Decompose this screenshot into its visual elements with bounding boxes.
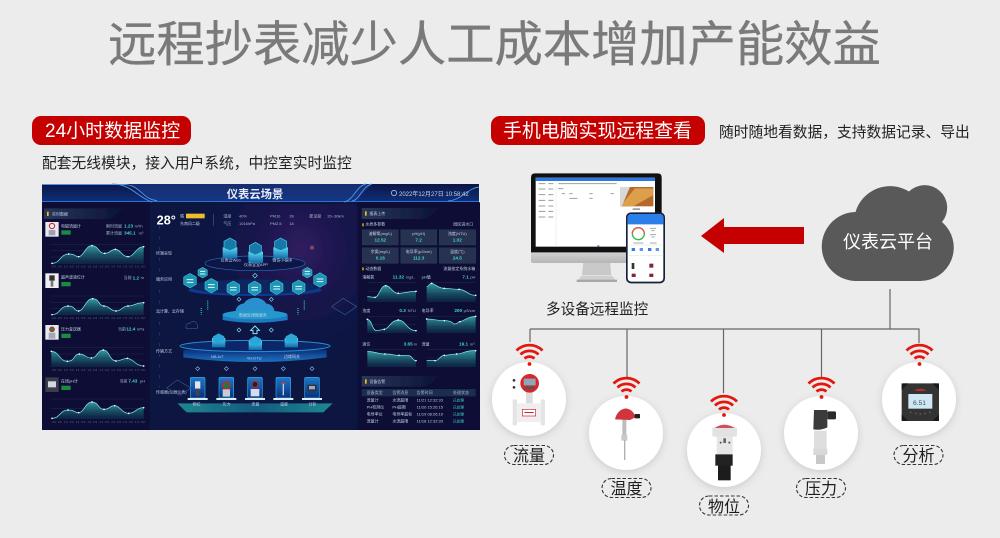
row: pressure chart: kPa bbox=[137, 327, 145, 332]
row: ultrasonic level chart: 1.2 bbox=[133, 275, 140, 280]
alarm table: 处理状态 bbox=[453, 389, 469, 395]
device label: flow bbox=[504, 446, 554, 465]
device label: 多设备远程监控 bbox=[546, 301, 649, 318]
icon: desktop monitor and phone bbox=[531, 173, 665, 283]
section header: report bbox=[362, 208, 442, 219]
dynamic data charts: 流量核定系统水箱 bbox=[443, 265, 475, 271]
water quality cards: 1.02 bbox=[453, 238, 462, 243]
dynamic data charts: NTU bbox=[408, 308, 416, 313]
right heading pill: 手机电脑实现远程查看 bbox=[503, 120, 692, 142]
dynamic data charts: 11.32 bbox=[393, 275, 404, 280]
terminal layer bbox=[205, 238, 305, 271]
row: pH chart: 当前 bbox=[119, 378, 127, 384]
center column: architecture diagram bbox=[156, 212, 357, 412]
dashboard header band: 仪表云场景 bbox=[227, 187, 283, 201]
dynamic data charts: 7.1 bbox=[462, 275, 469, 280]
alarm table: 11/19 08:26:10 bbox=[417, 411, 444, 416]
device label: level: 物位 bbox=[708, 498, 740, 516]
alarm table: 设备告警 bbox=[369, 378, 385, 384]
row: pressure chart: 当前 bbox=[118, 326, 126, 332]
row: flow meter chart: m³/h bbox=[135, 223, 143, 228]
device label: flow: 流量 bbox=[513, 447, 545, 465]
left heading pill: 24小时数据监控 bbox=[45, 120, 180, 142]
panel: monitoring dashboard bbox=[42, 184, 480, 430]
left column: live data bbox=[42, 202, 149, 430]
transmission layer: NB-IoT bbox=[211, 354, 224, 359]
section header: report: 报表上传 bbox=[369, 210, 385, 216]
dynamic data charts: mg/L bbox=[406, 275, 415, 280]
dynamic data charts: 200 bbox=[454, 308, 463, 313]
weather strip: 20~30km bbox=[327, 213, 345, 218]
row: pressure chart: 压力变送器 bbox=[61, 326, 81, 332]
dynamic data charts: 19.1 bbox=[459, 341, 468, 346]
dynamic data charts: m bbox=[414, 341, 418, 346]
alarm table: 已处理 bbox=[453, 411, 464, 416]
row: ultrasonic level chart: 当前 bbox=[124, 274, 132, 280]
weather strip: PM10 bbox=[270, 213, 281, 218]
section header: live data bbox=[44, 208, 125, 219]
sensor layer: 温度 bbox=[280, 400, 288, 406]
dashboard header band bbox=[42, 184, 479, 202]
dynamic data charts: pH bbox=[470, 275, 476, 280]
water quality cards: 浊度(NTU) bbox=[448, 230, 467, 236]
service layer bbox=[184, 267, 326, 301]
water quality cards: 园区进水口 bbox=[453, 220, 473, 226]
dynamic data charts: 浊度 bbox=[362, 307, 370, 313]
water quality cards: 余氯(mg/L) bbox=[371, 248, 391, 254]
weather strip: 40% bbox=[239, 213, 247, 218]
row: pressure chart bbox=[45, 325, 145, 372]
alarm table: 告警时间 bbox=[417, 389, 433, 395]
cloud: platform bbox=[822, 185, 954, 281]
row: flow meter chart: 345.1 bbox=[124, 231, 136, 236]
layer labels: 终端呈现 bbox=[156, 250, 172, 256]
alarm table: 已处理 bbox=[453, 419, 464, 424]
water quality cards: 24.5 bbox=[453, 256, 462, 261]
device label: temperature bbox=[602, 478, 651, 498]
layer labels: 传感器(仪器仪表) bbox=[156, 389, 187, 395]
dynamic data charts: pH值 bbox=[422, 274, 431, 280]
dynamic data charts bbox=[362, 265, 476, 367]
row: ultrasonic level chart: 超声波液位计 bbox=[61, 274, 85, 280]
alarm table: PH超限 bbox=[392, 403, 406, 409]
row: flow meter chart: 瞬时流量 bbox=[106, 222, 122, 228]
alarm table: 11/21 12:32:33 bbox=[417, 397, 444, 402]
alarm table: 电导率超标 bbox=[392, 410, 412, 416]
icon: wifi signal bbox=[614, 378, 640, 399]
row: flow meter chart: 电磁流量计 bbox=[61, 222, 81, 228]
dynamic data charts: 0.3 bbox=[399, 308, 406, 313]
device label: analysis bbox=[894, 446, 943, 465]
alarm table: 水流超限 bbox=[392, 396, 408, 402]
alarm table: 流量计 bbox=[367, 418, 379, 424]
sensor layer: 压力 bbox=[223, 400, 231, 406]
device label: pressure: 压力 bbox=[805, 480, 837, 498]
dynamic data charts: 动态数据 bbox=[365, 265, 381, 271]
alarm table bbox=[362, 376, 476, 424]
weather strip: 18 bbox=[289, 221, 295, 226]
alarm table: 告警消息 bbox=[392, 389, 408, 395]
alarm table: 已处理 bbox=[453, 397, 464, 402]
weather strip bbox=[157, 212, 345, 228]
dynamic data charts: m³ bbox=[470, 341, 475, 346]
weather strip: 晴 bbox=[180, 212, 184, 218]
device label: analysis: 分析 bbox=[902, 447, 935, 465]
sensor layer: 流量 bbox=[251, 400, 259, 406]
device: analyzer: 6.51 bbox=[913, 400, 926, 407]
icon: wifi signal bbox=[516, 345, 542, 366]
layer labels: 服务应用 bbox=[156, 276, 172, 282]
icon: wifi signal bbox=[906, 345, 932, 366]
dynamic data charts: μS/cm bbox=[464, 308, 476, 313]
row: flow meter chart: m³ bbox=[139, 230, 144, 235]
water quality cards: 溶解氧(mg/L) bbox=[369, 230, 393, 236]
weather strip: 东南风二级 bbox=[180, 220, 200, 226]
dynamic data charts: 流量 bbox=[422, 340, 430, 346]
alarm table: 电导率仪 bbox=[367, 410, 383, 416]
left description: 配套无线模块，接入用户系统，中控室实时监控 bbox=[42, 155, 352, 172]
dynamic data charts: 3.65 bbox=[404, 341, 413, 346]
device: temperature sensor bbox=[589, 378, 663, 470]
cloud: platform: 仪表云平台 bbox=[843, 232, 933, 252]
device label: pressure bbox=[796, 478, 846, 498]
row: pH chart: 7.43 bbox=[128, 379, 138, 384]
row: ultrasonic level chart bbox=[45, 273, 145, 320]
left heading pill bbox=[32, 116, 191, 145]
device: flow meter bbox=[492, 345, 566, 436]
row: flow meter chart: 09:00 10:00 11:00 12:00 13:00 14:00 15:00 16:00 bbox=[52, 265, 145, 269]
weather strip: 39 bbox=[289, 213, 295, 218]
water quality cards: 7.2 bbox=[415, 238, 422, 243]
device: level sensor bbox=[687, 396, 761, 487]
row: pH chart: 09:00 10:00 11:00 12:00 13:00 14:00 15:00 16:00 bbox=[52, 420, 145, 424]
icon: wifi signal bbox=[808, 378, 834, 399]
layer labels: 云计算、云存储 bbox=[156, 308, 184, 314]
device: analyzer bbox=[882, 345, 956, 436]
terminal layer: 仪表云Web bbox=[221, 256, 242, 262]
alarm table: 11/20 15:26:15 bbox=[417, 404, 444, 409]
terminal layer: 仪表宝宝APP bbox=[244, 261, 268, 267]
water quality cards: pH(pH) bbox=[412, 231, 426, 236]
title: 远程抄表减少人工成本增加产能效益 bbox=[108, 18, 881, 72]
sensor layer: 分析 bbox=[309, 400, 317, 406]
alarm table: PH检测仪 bbox=[367, 403, 384, 409]
weather strip: 湿度 bbox=[223, 212, 231, 218]
sensor layer: 物位 bbox=[193, 400, 201, 406]
weather strip: 气压 bbox=[223, 220, 231, 226]
sensor layer bbox=[167, 367, 333, 412]
terminal layer: 微信小程序 bbox=[272, 256, 292, 262]
cloud computing layer bbox=[186, 246, 357, 334]
water quality cards: 水质多参数 bbox=[365, 220, 385, 226]
water quality cards: 电导率(μS/cm) bbox=[406, 248, 432, 254]
weather strip: 1016hPa bbox=[239, 221, 256, 226]
transmission layer: 边缘网关 bbox=[284, 353, 300, 359]
weather strip: 28° bbox=[157, 214, 176, 228]
dashboard header band: 2022年12月27日 10:58:42 bbox=[399, 190, 469, 198]
dynamic data charts: 电导率 bbox=[422, 307, 434, 313]
row: flow meter chart: 累计流量 bbox=[106, 229, 122, 235]
water quality cards: 温度(℃) bbox=[450, 248, 465, 254]
row: flow meter chart bbox=[45, 222, 145, 269]
water quality cards: 0.16 bbox=[376, 256, 385, 261]
device label: temperature: 温度 bbox=[610, 480, 643, 498]
right heading pill bbox=[491, 116, 705, 145]
right column: water quality data bbox=[358, 202, 480, 430]
alarm table: 流量计 bbox=[367, 396, 379, 402]
water quality cards bbox=[362, 220, 476, 263]
weather strip: PM2.5 bbox=[270, 221, 282, 226]
water quality cards: 12.52 bbox=[375, 238, 387, 243]
icon: wifi signal bbox=[711, 396, 737, 417]
dynamic data charts: 液位 bbox=[362, 340, 370, 346]
row: ultrasonic level chart: 09:00 10:00 11:00 12:00 13:00 14:00 15:00 16:00 bbox=[52, 316, 145, 320]
alarm table: 水流超限 bbox=[392, 418, 408, 424]
dynamic data charts: 溶解氧 bbox=[362, 274, 374, 280]
transmission layer: 4G-DTU bbox=[247, 355, 262, 360]
monitor bbox=[531, 173, 662, 282]
row: pH chart bbox=[45, 377, 145, 424]
layer labels: 传输方式 bbox=[156, 348, 172, 354]
row: ultrasonic level chart: m bbox=[141, 275, 145, 280]
device: pressure sensor bbox=[784, 378, 858, 470]
row: pressure chart: 09:00 10:00 11:00 12:00 13:00 14:00 15:00 16:00 bbox=[52, 368, 145, 372]
device label: level bbox=[700, 496, 748, 516]
connector lines bbox=[530, 289, 920, 393]
transmission layer bbox=[180, 333, 330, 362]
layer labels bbox=[156, 226, 187, 395]
right description: 随时随地看数据，支持数据记录、导出 bbox=[719, 124, 970, 141]
row: flow meter chart: 1.23 bbox=[124, 223, 133, 228]
alarm table: 设备类型 bbox=[367, 389, 383, 395]
water quality cards: 112.3 bbox=[413, 256, 425, 261]
row: pH chart: pH bbox=[140, 379, 145, 384]
weather strip: 能见度 bbox=[309, 212, 321, 218]
section header: live data: 实时数据 bbox=[52, 210, 68, 216]
row: pH chart: 在线pH计 bbox=[61, 377, 78, 383]
arrow bbox=[701, 218, 804, 253]
cloud computing layer: 数据处理微服务 bbox=[239, 312, 267, 318]
alarm table: 11/18 12:32:33 bbox=[417, 419, 444, 424]
phone bbox=[626, 212, 665, 283]
alarm table: 已处理 bbox=[453, 404, 464, 409]
row: pressure chart: 12.4 bbox=[126, 327, 136, 332]
